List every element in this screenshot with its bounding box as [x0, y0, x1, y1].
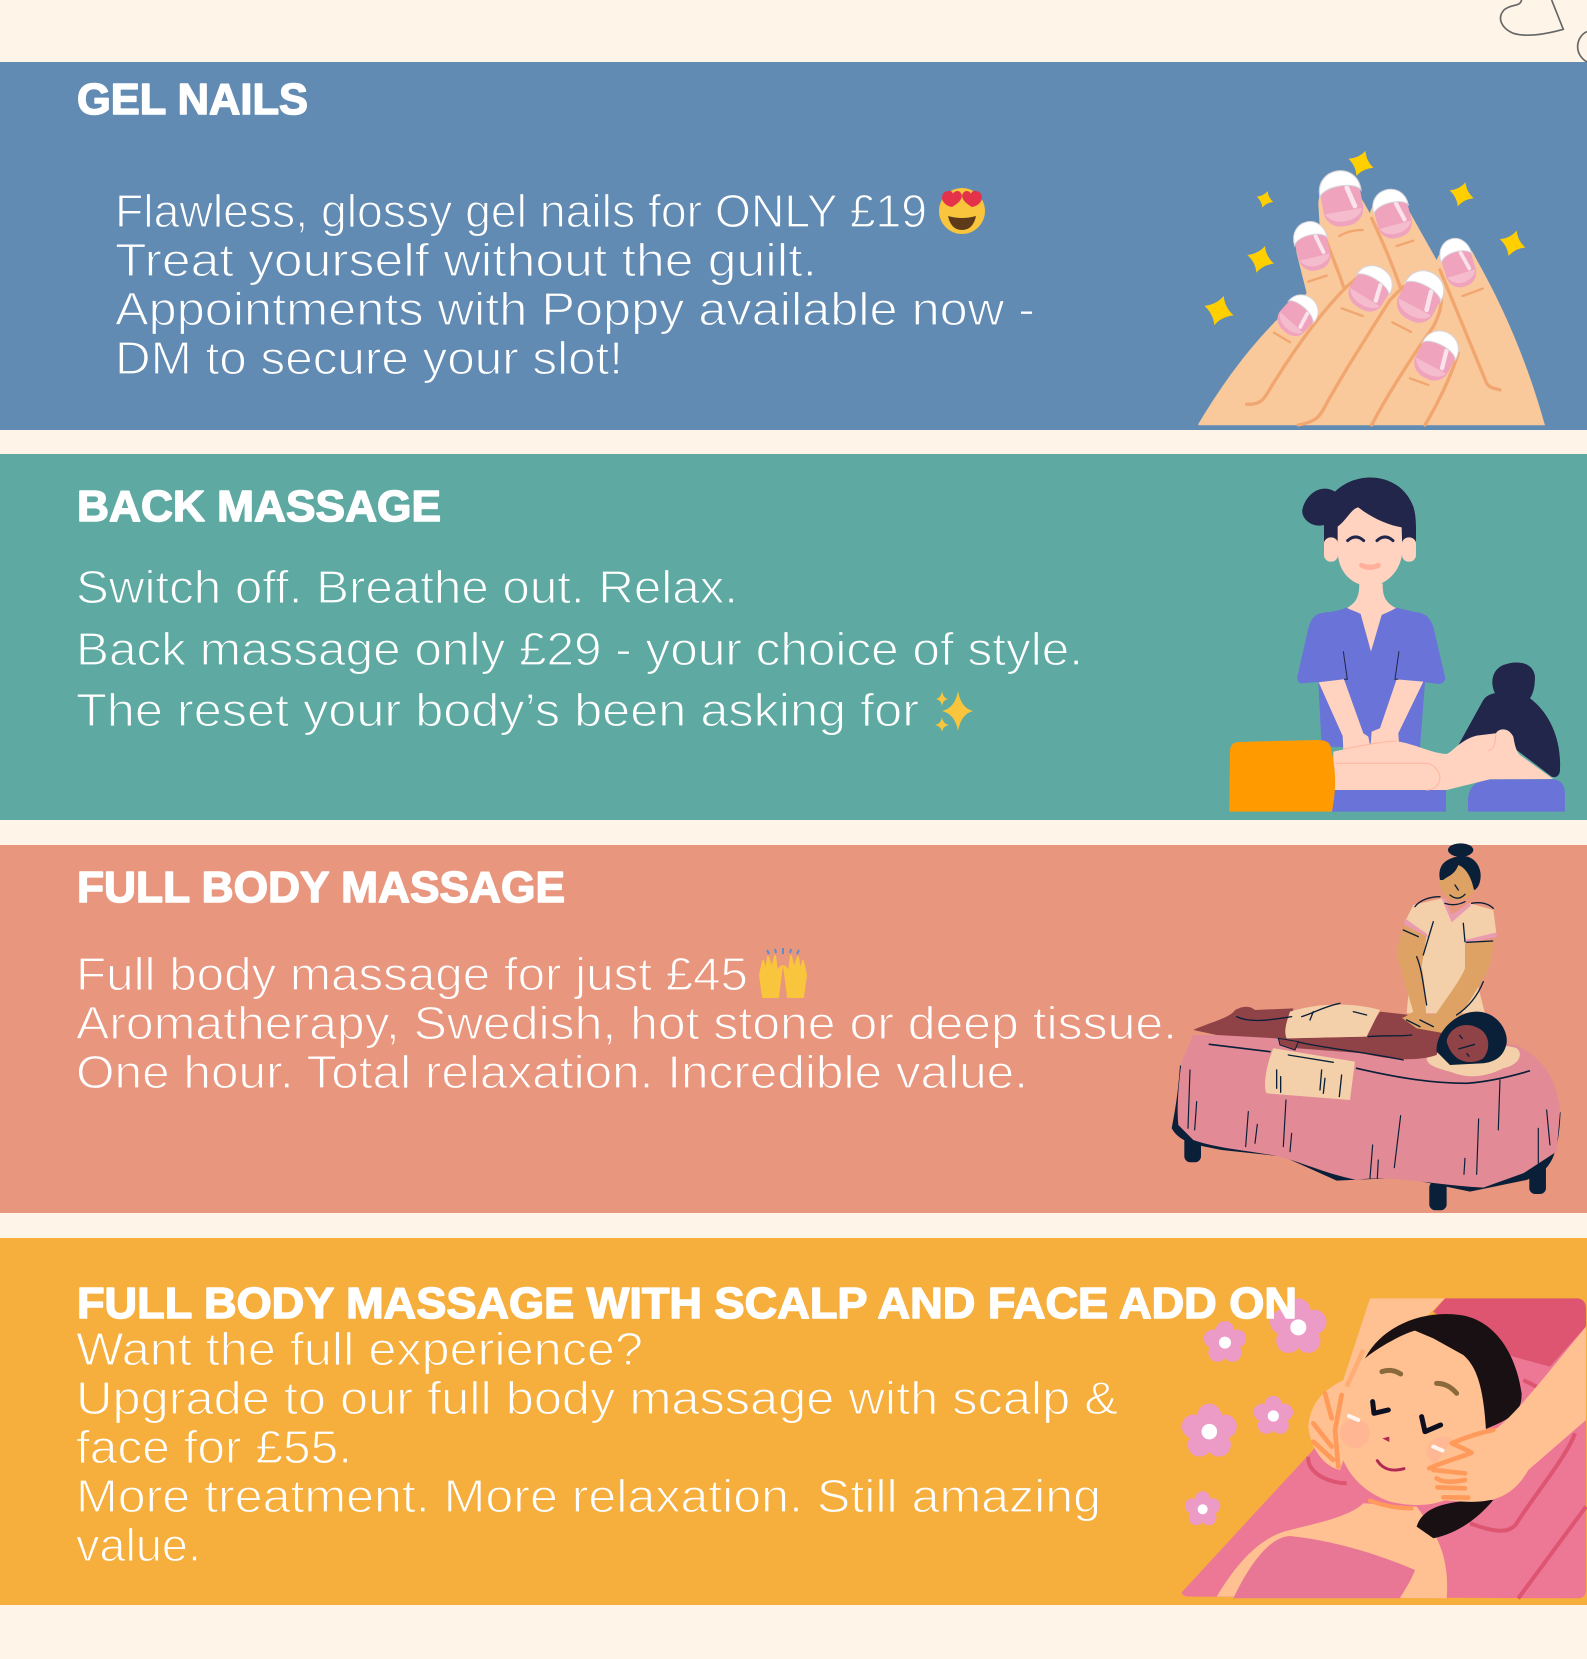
- panel: full body massage with scalp and face add on: [0, 1238, 1587, 1605]
- icon: heart eyes emoji: [939, 188, 985, 234]
- icon: raised hands emoji: [760, 948, 806, 997]
- text block: back massage offer: [76, 561, 1083, 736]
- text block: full body massage offer: Full body massage for just £45: [76, 948, 748, 1000]
- heading: full body massage: FULL BODY MASSAGE: [77, 863, 565, 912]
- text block: full body massage offer: One hour. Total relaxation. Incredible value.: [76, 1046, 1028, 1098]
- text block: back massage offer: Back massage only £29 - your choice of style.: [76, 623, 1083, 675]
- heading: gel nails: GEL NAILS: [77, 75, 308, 124]
- text block: add on massage offer: Want the full experience?: [76, 1323, 643, 1375]
- text block: add on massage offer: value.: [76, 1519, 201, 1571]
- text block: add on massage offer: Upgrade to our full body massage with scalp &: [76, 1372, 1118, 1424]
- text block: gel nails offer: Appointments with Poppy available now -: [115, 283, 1035, 335]
- text block: gel nails offer: DM to secure your slot!: [115, 332, 623, 384]
- panel: full body massage: [0, 843, 1587, 1213]
- text block: add on massage offer: face for £55.: [76, 1421, 352, 1473]
- text block: add on massage offer: More treatment. More relaxation. Still amazing: [76, 1470, 1101, 1522]
- text block: add on massage offer: [76, 1323, 1118, 1571]
- heading: add on massage: FULL BODY MASSAGE WITH SCALP AND FACE ADD ON: [77, 1279, 1297, 1328]
- illustration: therapist giving back massage: [1229, 477, 1565, 812]
- heading: back massage: BACK MASSAGE: [77, 482, 441, 531]
- text block: full body massage offer: Aromatherapy, Swedish, hot stone or deep tissue.: [76, 997, 1177, 1049]
- icon: sparkles emoji: [935, 691, 973, 732]
- illustration: therapist with client on massage table: [1172, 843, 1561, 1210]
- decorative heart outlines: [1501, 0, 1587, 62]
- text block: back massage offer: The reset your body’s been asking for: [76, 684, 919, 736]
- text block: full body massage offer: [76, 948, 1177, 1098]
- panel: gel nails: [0, 62, 1587, 430]
- text block: gel nails offer: Flawless, glossy gel nails for ONLY £19: [115, 185, 927, 237]
- text block: gel nails offer: Treat yourself without the guilt.: [115, 234, 817, 286]
- illustration: face massage with flowers: [1182, 1298, 1586, 1598]
- illustration: manicured hand with sparkles: [1198, 146, 1545, 425]
- panel: back massage: [0, 454, 1587, 820]
- text block: gel nails offer: [115, 185, 1035, 384]
- text block: back massage offer: Switch off. Breathe out. Relax.: [76, 561, 738, 613]
